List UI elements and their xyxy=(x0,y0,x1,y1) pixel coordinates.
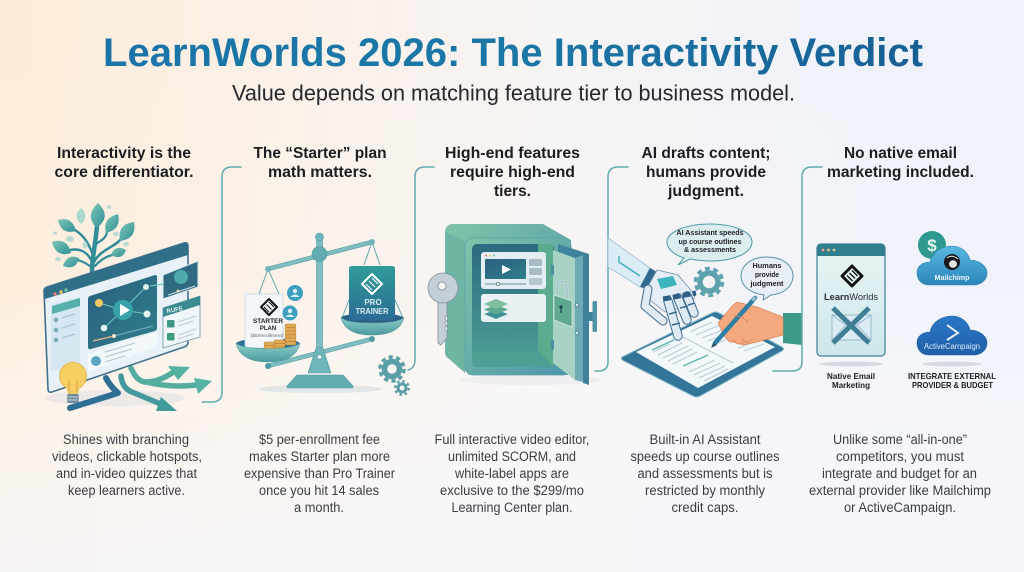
right pan xyxy=(341,317,404,335)
heading: interactivity: core differentiator. xyxy=(54,164,194,181)
human hand with pen xyxy=(711,296,783,348)
heading: no native email: No native email xyxy=(844,145,957,162)
heading: interactivity xyxy=(54,145,194,181)
body text: high-end features: Learning Center plan. xyxy=(452,500,572,515)
label: native email marketing: Native Email xyxy=(827,371,875,381)
body text: interactivity: and in-video quizzes that xyxy=(56,466,197,481)
connector bracket 1 xyxy=(202,167,241,402)
coin stacks xyxy=(264,324,296,350)
icon: balance scale xyxy=(236,233,409,395)
body text: AI drafts: Built-in AI Assistant xyxy=(650,432,761,447)
body text: starter plan: expensive than Pro Trainer xyxy=(244,466,395,481)
body text: no native email: Unlike some “all-in-one” xyxy=(833,432,967,447)
heading: no native email xyxy=(827,145,974,181)
body text: starter plan xyxy=(244,432,395,515)
left pan xyxy=(236,343,300,362)
panel: interactivity xyxy=(44,145,212,498)
robot arm and hand xyxy=(608,238,696,336)
heading: interactivity: Interactivity is the xyxy=(57,145,191,162)
gear xyxy=(696,268,722,296)
heading: starter plan: math matters. xyxy=(268,164,372,181)
icon: Mailchimp cloud with dollar badge: Mailchimp xyxy=(934,273,970,282)
icon: ActiveCampaign cloud xyxy=(917,316,987,355)
heading: high-end features xyxy=(445,145,580,200)
body text: high-end features: white-label apps are xyxy=(454,466,569,481)
safe body xyxy=(445,224,571,375)
heading: starter plan xyxy=(254,145,386,181)
speech bubble: humans: Humans xyxy=(752,261,782,270)
panel: high-end features xyxy=(428,145,600,515)
body text: AI drafts xyxy=(630,432,780,515)
label: native email marketing: Marketing xyxy=(832,380,870,390)
panel: no native email xyxy=(809,145,996,515)
speech bubble: AI assistant: up course outlines xyxy=(678,239,742,246)
starter plan card: STARTER xyxy=(253,318,283,325)
body text: interactivity xyxy=(52,432,202,498)
icon: ActiveCampaign cloud: ActiveCampaign xyxy=(924,342,980,351)
speech bubble: humans xyxy=(741,257,793,300)
body text: no native email: external provider like Mailchimp xyxy=(809,483,991,498)
heading: AI drafts: AI drafts content; xyxy=(642,145,770,162)
body text: no native email xyxy=(809,432,991,515)
heading: AI drafts xyxy=(642,145,770,200)
label: integrate external provider: PROVIDER & BUDGET xyxy=(912,380,994,390)
right pan back xyxy=(341,313,403,323)
safe door xyxy=(551,244,597,385)
body text: interactivity: Shines with branching xyxy=(63,432,189,447)
subtitle: Value depends on matching feature tier to business model. xyxy=(232,80,795,106)
pro trainer card xyxy=(349,266,395,320)
starter plan card xyxy=(245,294,284,348)
body text: interactivity: keep learners active. xyxy=(68,483,185,498)
monitor window xyxy=(44,243,188,392)
speech bubble: AI assistant xyxy=(667,224,752,265)
body text: high-end features xyxy=(434,432,590,515)
tablet xyxy=(621,312,784,397)
body text: starter plan: $5 per-enrollment fee xyxy=(259,432,380,447)
starter plan card: PLAN xyxy=(260,326,276,332)
heading: high-end features: require high-end xyxy=(450,164,575,181)
icon: Mailchimp cloud with dollar badge: $ xyxy=(927,236,937,255)
icon: LearnWorlds window with crossed-out email: LearnWorlds xyxy=(824,292,878,303)
user avatars xyxy=(282,285,303,320)
body text: AI drafts: speeds up course outlines xyxy=(630,449,780,464)
icon: robot and human hands on tablet xyxy=(608,224,802,397)
icon: monitor with tree, lightbulb and branching arrows xyxy=(44,203,212,411)
connector bracket 2 xyxy=(408,167,434,370)
left pan back xyxy=(236,338,300,350)
key xyxy=(428,273,458,345)
lightbulb xyxy=(60,362,86,403)
label: integrate external provider: INTEGRATE EXTERNAL xyxy=(908,371,996,381)
body text: AI drafts: credit caps. xyxy=(672,500,738,515)
tree xyxy=(52,203,134,272)
body text: no native email: integrate and budget for an xyxy=(822,466,977,481)
body text: high-end features: unlimited SCORM, and xyxy=(448,449,576,464)
heading: high-end features: High-end features xyxy=(445,145,580,162)
title: LearnWorlds 2026: The Interactivity Verdict xyxy=(103,31,923,75)
side video panel xyxy=(150,261,198,299)
speech bubble: AI assistant: & assessments xyxy=(684,247,736,254)
body text: no native email: competitors, you must xyxy=(836,449,964,464)
starter plan card: ($5/enrollment) xyxy=(250,333,284,338)
panel: starter plan xyxy=(236,145,409,515)
gears xyxy=(380,357,409,395)
cloud shadow xyxy=(922,362,982,366)
heading: AI drafts: judgment. xyxy=(667,183,744,200)
body text: no native email: or ActiveCampaign. xyxy=(844,500,956,515)
heading: no native email: marketing included. xyxy=(827,164,974,181)
speech bubble: AI assistant: AI Assistant speeds xyxy=(676,230,744,237)
pro trainer card: PRO xyxy=(364,298,382,307)
padlock xyxy=(554,281,572,327)
scale beams and post xyxy=(265,233,375,388)
body text: AI drafts: and assessments but is xyxy=(638,466,773,481)
body text: starter plan: makes Starter plan more xyxy=(249,449,390,464)
body text: starter plan: once you hit 14 sales xyxy=(259,483,379,498)
icon: open safe with key xyxy=(428,224,600,385)
heading: AI drafts: humans provide xyxy=(646,164,766,181)
icon: Mailchimp cloud with dollar badge xyxy=(917,231,987,285)
video panel inside safe xyxy=(481,252,546,289)
speech bubble: humans: provide xyxy=(755,270,779,279)
connector bracket 4 xyxy=(773,167,822,371)
label: native email marketing xyxy=(827,371,875,390)
branching video player xyxy=(88,275,157,372)
branching arrows xyxy=(70,366,212,411)
label: integrate external provider xyxy=(908,371,996,390)
heading: high-end features: tiers. xyxy=(494,183,531,200)
body text: high-end features: exclusive to the $299/mo xyxy=(440,483,584,498)
speech bubble: humans: judgment xyxy=(750,279,784,288)
icon: LearnWorlds window with crossed-out email xyxy=(817,244,885,366)
quiz panel: RUFE xyxy=(166,306,183,315)
body text: AI drafts: restricted by monthly xyxy=(645,483,765,498)
body text: high-end features: Full interactive video editor, xyxy=(434,432,590,447)
SCORM layers panel inside safe xyxy=(481,294,546,322)
shirt cuff xyxy=(783,313,802,345)
pro trainer card: TRAINER xyxy=(356,307,389,316)
panel: AI drafts xyxy=(608,145,802,515)
body text: interactivity: videos, clickable hotspots, xyxy=(52,449,202,464)
body text: starter plan: a month. xyxy=(294,500,344,515)
quiz panel xyxy=(163,296,200,348)
connector bracket 3 xyxy=(595,167,628,371)
heading: starter plan: The “Starter” plan xyxy=(254,145,386,162)
